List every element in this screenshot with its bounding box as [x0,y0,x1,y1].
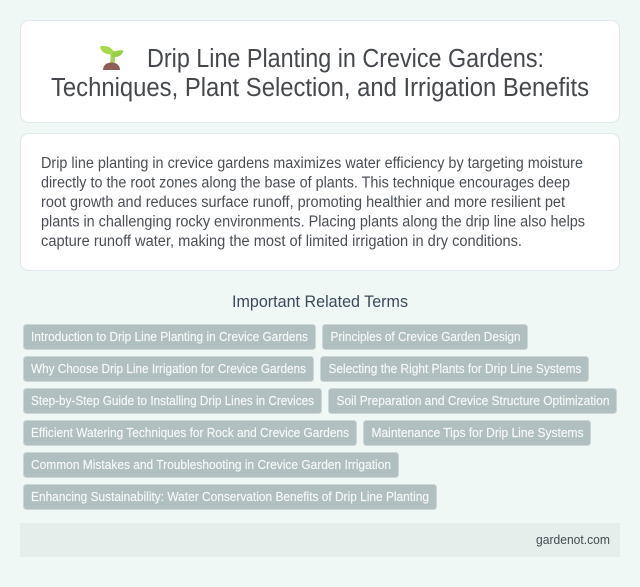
tag [322,324,528,350]
tag: Introduction to Drip Line Planting in Crevice Gardens [31,330,308,344]
tag: Why Choose Drip Line Irrigation for Crevice Gardens [31,362,306,376]
panel: title card [20,20,620,122]
tag [328,388,616,414]
description text: root growth and reduces surface runoff, promoting healthier and more resilient pet [41,194,566,211]
heading: important related terms: Important Related Terms [232,293,408,311]
tag [320,356,588,382]
description text [41,155,585,250]
tag [24,420,356,446]
tag: Enhancing Sustainability: Water Conservation Benefits of Drip Line Planting [31,490,429,504]
description text: directly to the root zones along the base of plants. This technique encourages deep [41,174,570,192]
title: Techniques, Plant Selection, and Irrigation Benefits [51,74,589,102]
tag [24,356,314,382]
tag [24,484,436,510]
tag: Maintenance Tips for Drip Line Systems [372,426,584,440]
tag: Common Mistakes and Troubleshooting in Crevice Garden Irrigation [31,458,391,472]
title [51,45,589,102]
tag: Selecting the Right Plants for Drip Line Systems [328,362,582,376]
tag [24,388,322,414]
description text: Drip line planting in crevice gardens maximizes water efficiency by targeting moisture [41,155,583,172]
tag: Principles of Crevice Garden Design [330,330,521,344]
title: Drip Line Planting in Crevice Gardens: [147,45,544,73]
description text: capture runoff water, making the most of limited irrigation in dry conditions. [41,233,522,250]
tag: Efficient Watering Techniques for Rock and Crevice Gardens [31,426,349,440]
panel: description [20,134,620,270]
tag: Soil Preparation and Crevice Structure Optimization [336,394,610,408]
description text: plants in challenging rocky environments. Placing plants along the drip line also helps [41,214,585,230]
tag [24,324,316,350]
related terms tags [24,324,616,510]
tag [364,420,590,446]
tag [24,452,398,478]
tag: Step-by-Step Guide to Installing Drip Lines in Crevices [31,394,314,408]
icon: seedling [100,46,124,70]
source credit: gardenot.com [536,532,610,547]
footer [20,523,620,557]
